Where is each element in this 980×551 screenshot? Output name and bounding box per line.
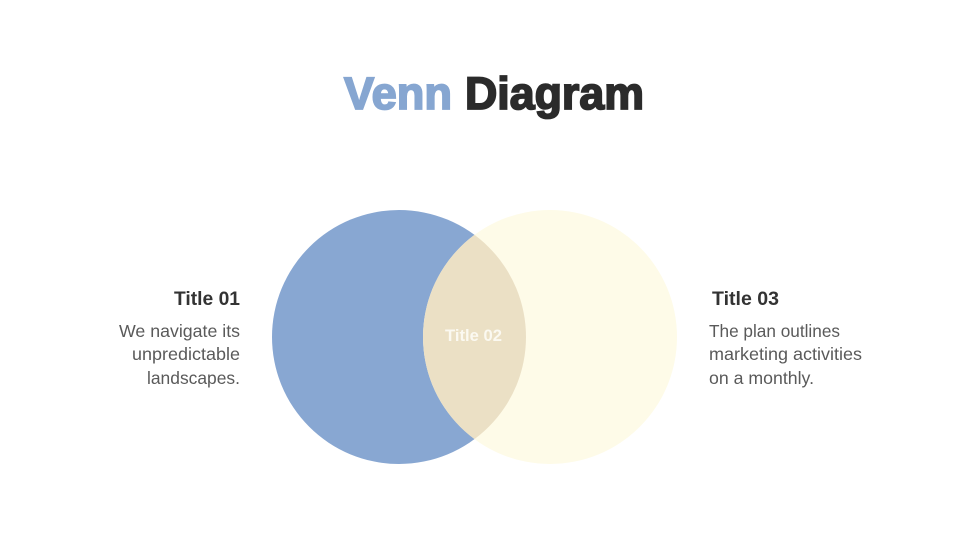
description: right: The plan outlines [709,321,840,341]
heading: Title 03: Title 03 [712,289,779,310]
right text block [709,289,862,388]
title word: Venn: Venn [344,68,452,119]
description: left: landscapes. [147,368,240,388]
overlap label: Title 02 [445,327,502,345]
overlap region [423,235,526,439]
description: left: We navigate its [119,321,240,341]
description: right [709,321,862,388]
circle: left blue [272,210,526,464]
heading: Title 01: Title 01 [174,289,240,310]
circle: right yellow [423,210,677,464]
infographic [119,75,862,464]
description: left: unpredictable [132,344,240,364]
title word: Diagram: Diagram [465,68,644,119]
title [344,68,644,119]
description: right: on a monthly. [709,368,814,388]
description: right: marketing activities [709,344,862,364]
description: left [119,321,240,388]
left text block [119,289,240,388]
venn diagram [272,210,677,464]
